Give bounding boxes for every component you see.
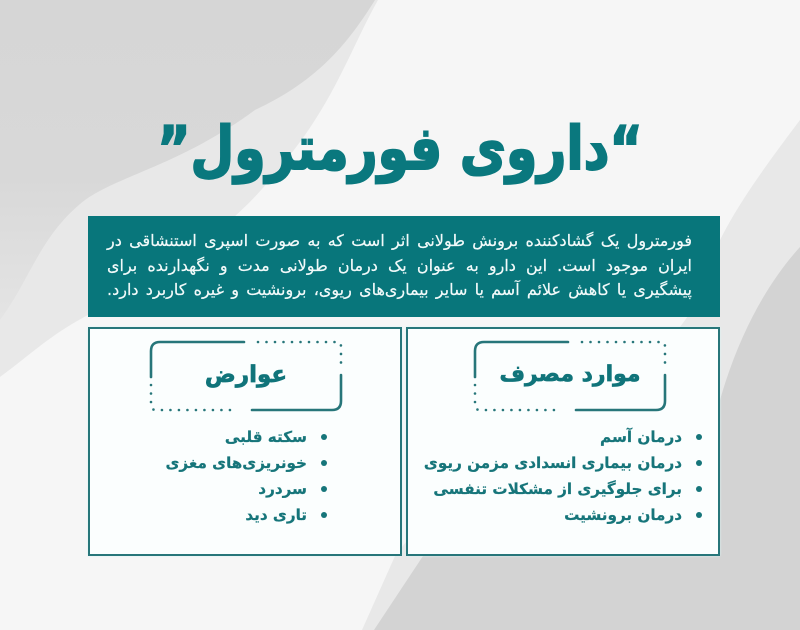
heading frame: side effects	[150, 340, 342, 412]
list: uses: درمان بیماری انسدادی مزمن ریوی	[424, 454, 682, 472]
intro text panel	[88, 216, 720, 317]
panel: uses	[406, 327, 720, 556]
list: uses	[424, 427, 702, 524]
panel: side effects	[88, 327, 402, 556]
title: “داروی فورمترول”	[157, 114, 643, 184]
intro text panel: ایران موجود است. این دارو به عنوان یک درمان طولانی مدت و نگهدارنده برای	[107, 256, 692, 275]
heading frame: uses	[474, 340, 666, 412]
heading: side effects: عوارض	[205, 362, 287, 388]
list: uses: برای جلوگیری از مشکلات تنفسی	[433, 480, 682, 498]
list: side effects	[166, 428, 327, 524]
intro text panel: فورمترول یک گشادکننده برونش طولانی اثر است که به صورت اسپری استنشاقی در	[107, 231, 692, 250]
intro text panel: پیشگیری یا کاهش علائم آسم یا سایر بیماری‌های ریوی، برونشیت و غیره کاربرد دارد.	[107, 280, 692, 299]
list: side effects: سکته قلبی	[225, 428, 307, 446]
list: side effects: خونریزی‌های مغزی	[166, 454, 307, 472]
list: side effects: تاری دید	[245, 506, 307, 524]
list: side effects: سردرد	[258, 480, 307, 498]
list: uses: درمان آسم	[600, 428, 682, 446]
heading: uses: موارد مصرف	[499, 362, 641, 387]
list: uses: درمان برونشیت	[564, 506, 682, 524]
